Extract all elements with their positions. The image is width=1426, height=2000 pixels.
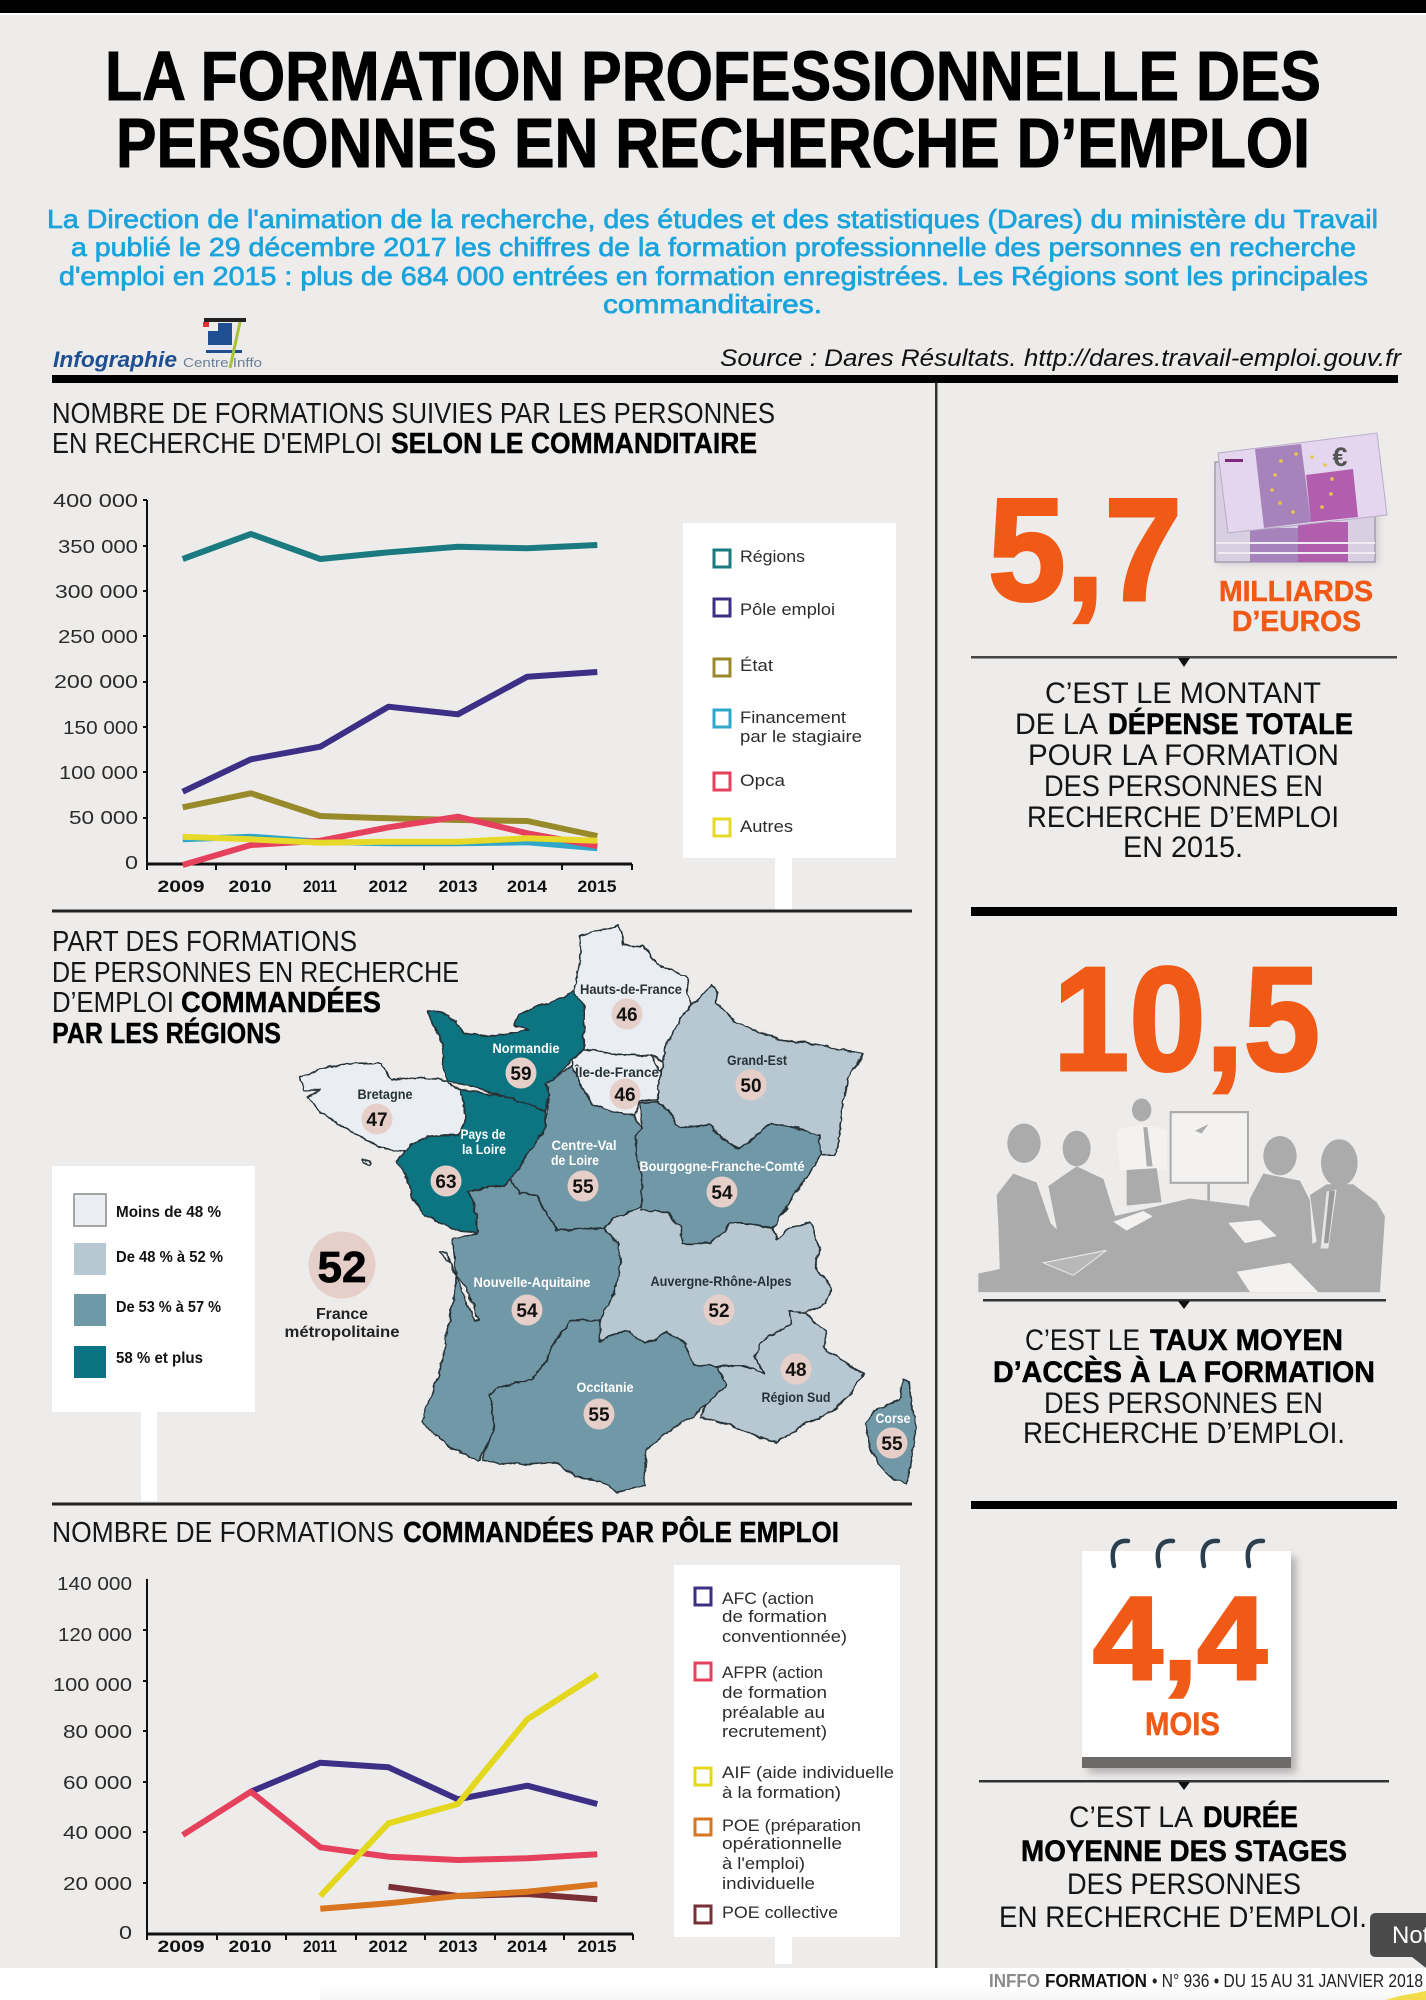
region: Normandie: Normandie (492, 1040, 560, 1056)
intro text (47, 204, 1378, 319)
region: Corse: 55 (881, 1434, 903, 1455)
heading: Pôle emploi (52, 1515, 839, 1549)
legend: Pôle emploi: AIF (aide individuelle (722, 1763, 894, 1782)
text: dépense totale (1015, 677, 1353, 864)
legend: Pôle emploi: POE (préparation (722, 1816, 861, 1835)
line chart: commanditaire: 200 000 (54, 672, 138, 692)
line chart: Pôle emploi: 120 000 (58, 1625, 132, 1645)
line chart: commanditaire: 100 000 (59, 763, 138, 783)
legend: commanditaire: Opca (740, 771, 786, 790)
region: Grand-Est (727, 1052, 787, 1100)
region: Hauts-de-France: Hauts-de-France (580, 981, 682, 997)
icon: euro banknotes (1215, 433, 1387, 564)
line chart: commanditaire: 0 (125, 853, 138, 873)
line chart: Pôle emploi: 2011 (303, 1937, 337, 1956)
callout: France métropolitaine 52: 52 (318, 1243, 366, 1292)
line chart: Pôle emploi: 2015 (578, 1937, 616, 1956)
heading: part des formations: PAR LES RÉGIONS (52, 1016, 281, 1050)
icon: calendar with 4,4 mois (1082, 1541, 1296, 1773)
legend: map: Moins de 48 % (116, 1204, 221, 1221)
arrow: divider pointer (971, 656, 1397, 667)
region: Corse (876, 1410, 911, 1458)
region: Région Sud (762, 1354, 830, 1405)
text: taux moyen: DES PERSONNES EN (1044, 1387, 1323, 1420)
line chart: commanditaire: 400 000 (53, 491, 138, 511)
heading: Pôle emploi: NOMBRE DE FORMATIONS (52, 1517, 394, 1549)
region: Pays de la Loire (430, 1126, 506, 1196)
text: durée moyenne: DURÉE (1203, 1800, 1298, 1834)
heading: commanditaire: SELON LE COMMANDITAIRE (391, 428, 757, 460)
legend: map: De 48 % à 52 % (116, 1249, 223, 1266)
line chart: Pôle emploi: 2012 (368, 1937, 408, 1956)
region: Auvergne-Rhône-Alpes (650, 1273, 792, 1326)
region: Grand-Est: 50 (740, 1076, 762, 1097)
line chart: commanditaire: 300 000 (55, 582, 138, 602)
region: Normandie (492, 1040, 560, 1088)
line chart: Pôle emploi: 0 (119, 1923, 132, 1943)
figure: 10,5: 10,5 (1053, 937, 1320, 1102)
legend: Pôle emploi: à la formation) (722, 1783, 841, 1802)
region: Pays de la Loire: la Loire (462, 1141, 506, 1157)
line chart: Pôle emploi: 2009 (158, 1937, 204, 1956)
line chart: Pôle emploi: 80 000 (63, 1722, 132, 1742)
panel: 5,7 milliards d'euros (971, 433, 1397, 864)
region: Nouvelle-Aquitaine: 54 (516, 1301, 538, 1322)
callout: France métropolitaine 52 (284, 1232, 400, 1341)
legend: Pôle emploi: recrutement) (722, 1722, 827, 1741)
region: Auvergne-Rhône-Alpes: Auvergne-Rhône-Alpes (650, 1273, 792, 1289)
figure: 5,7: 5,7 (988, 468, 1182, 631)
line chart: commanditaire: 2013 (438, 877, 478, 896)
region: Région Sud: Région Sud (762, 1389, 830, 1405)
legend: commanditaire: par le stagiaire (740, 727, 862, 746)
tooltip (1370, 1913, 1426, 1968)
text: taux moyen: TAUX MOYEN (1150, 1324, 1343, 1357)
heading: commanditaire (52, 398, 775, 460)
heading: part des formations: D’EMPLOI (52, 987, 174, 1019)
legend: commanditaire: Pôle emploi (740, 600, 835, 619)
text: dépense totale: C’EST LE MONTANT (1045, 677, 1321, 710)
line chart: Pôle emploi: 140 000 (57, 1574, 132, 1594)
text: dépense totale: DÉPENSE TOTALE (1108, 707, 1353, 741)
icon: meeting silhouette (978, 1099, 1385, 1292)
region: Bourgogne-Franche-Comté: Bourgogne-Franche-Comté (640, 1158, 805, 1174)
region: Auvergne-Rhône-Alpes: 52 (708, 1301, 730, 1322)
line chart: Pôle emploi: 2014 (507, 1937, 548, 1956)
legend: commanditaire: Régions (740, 547, 805, 566)
footer: FORMATION (1045, 1971, 1147, 1991)
map of France (302, 925, 916, 1492)
callout: France métropolitaine 52: France (316, 1306, 368, 1323)
legend: map: 58 % et plus (116, 1350, 203, 1367)
region: Pays de la Loire: Pays de (460, 1126, 506, 1142)
title (105, 37, 1321, 182)
line chart: commanditaire (53, 491, 632, 896)
heading: part des formations: DE PERSONNES EN RECHERCHE (52, 957, 459, 989)
line chart: commanditaire: 2014 (507, 877, 548, 896)
region: Bretagne: Bretagne (358, 1086, 413, 1102)
region: Centre-Val de Loire (551, 1137, 616, 1202)
label: milliards d'euros (1219, 576, 1373, 638)
legend: Pôle emploi: opérationnelle (722, 1834, 842, 1853)
source: Source : Dares Résultats. http://dares.travail-emploi.gouv.fr (720, 345, 1402, 372)
region: Bourgogne-Franche-Comté: 54 (711, 1183, 733, 1204)
heading: commanditaire: EN RECHERCHE D'EMPLOI (52, 428, 382, 460)
region: Nouvelle-Aquitaine (474, 1274, 591, 1326)
line chart: commanditaire: 2015 (578, 877, 616, 896)
region: Île-de-France: Île-de-France (574, 1063, 659, 1080)
intro text: a publié le 29 décembre 2017 les chiffres de la formation professionnelle des personnes en recherche (71, 232, 1356, 262)
legend: map: De 53 % à 57 % (116, 1299, 221, 1316)
line chart: Pôle emploi: 2010 (228, 1937, 272, 1956)
intro text: d'emploi en 2015 : plus de 684 000 entrées en formation enregistrées. Les Régions sont les principales (59, 261, 1368, 291)
text: taux moyen: D’ACCÈS À LA FORMATION (993, 1355, 1375, 1389)
line chart: Pôle emploi: 40 000 (63, 1823, 132, 1843)
text: dépense totale: EN 2015. (1123, 831, 1243, 864)
panel: formations selon le commanditaire (52, 398, 896, 910)
line chart: commanditaire: 2009 (158, 877, 204, 896)
text: durée moyenne: EN RECHERCHE D’EMPLOI. (999, 1901, 1367, 1934)
region: Grand-Est: Grand-Est (727, 1052, 787, 1068)
region: Centre-Val de Loire: 55 (572, 1177, 594, 1198)
line chart: commanditaire: 250 000 (58, 627, 138, 647)
icon: euro banknotes: € (1332, 442, 1348, 472)
legend: Pôle emploi: AFPR (action (722, 1663, 823, 1682)
credit: Infographie Centre Inffo (53, 318, 262, 372)
region: Bretagne: 47 (366, 1110, 388, 1131)
region: Centre-Val de Loire: Centre-Val (552, 1137, 616, 1153)
intro text: La Direction de l'animation de la recherche, des études et des statistiques (Dares) du ministère du Travail (47, 204, 1378, 234)
line chart: commanditaire: 2012 (368, 877, 408, 896)
region: Hauts-de-France: 46 (616, 1005, 638, 1026)
region: Hauts-de-France (580, 981, 682, 1030)
text: dépense totale: RECHERCHE D’EMPLOI (1027, 801, 1339, 834)
panel: formations commandées par Pôle emploi (52, 1515, 900, 1964)
text: dépense totale: DE LA (1015, 708, 1098, 741)
legend: Pôle emploi: de formation (722, 1683, 827, 1702)
legend: Pôle emploi: de formation (722, 1607, 827, 1626)
legend: Pôle emploi: préalable au (722, 1703, 825, 1722)
credit: Infographie Centre Inffo: Infographie (53, 347, 177, 372)
region: Île-de-France (574, 1063, 659, 1110)
text: dépense totale: POUR LA FORMATION (1028, 739, 1339, 772)
legend: map (52, 1166, 255, 1501)
text: dépense totale: DES PERSONNES EN (1044, 770, 1323, 803)
line chart: Pôle emploi: 60 000 (63, 1773, 132, 1793)
panel: part des formations commandées par les régions (52, 925, 916, 1501)
region: Nouvelle-Aquitaine: Nouvelle-Aquitaine (474, 1274, 591, 1290)
heading: part des formations: COMMANDÉES (181, 985, 381, 1019)
icon: calendar with 4,4 mois: 4,4 (1093, 1573, 1267, 1705)
icon: calendar with 4,4 mois: MOIS (1145, 1706, 1220, 1742)
line chart: Pôle emploi (53, 1574, 633, 1956)
region: Centre-Val de Loire: de Loire (551, 1152, 599, 1168)
region: Bretagne (358, 1086, 413, 1134)
line chart: Pôle emploi: 2013 (438, 1937, 478, 1956)
region: Corse: Corse (876, 1410, 911, 1426)
intro text: commanditaires. (603, 289, 822, 319)
region: Normandie: 59 (510, 1064, 532, 1085)
icon: Centre Inffo logo (203, 318, 246, 368)
region: Région Sud: 48 (785, 1360, 807, 1381)
legend: Pôle emploi: POE collective (722, 1903, 838, 1922)
legend: Pôle emploi: individuelle (722, 1874, 815, 1893)
heading: part des formations: PART DES FORMATIONS (52, 926, 357, 958)
text: durée moyenne: DES PERSONNES (1067, 1868, 1301, 1901)
panel: 4,4 mois (979, 1541, 1389, 1934)
line chart: commanditaire: 2011 (303, 877, 337, 896)
heading: part des formations (52, 926, 459, 1050)
region: Occitanie: Occitanie (576, 1379, 634, 1395)
legend: commanditaire (683, 523, 896, 910)
region: Occitanie (576, 1379, 634, 1430)
arrow: divider pointer (983, 1299, 1386, 1309)
legend: commanditaire: État (740, 656, 773, 675)
text: durée moyenne: MOYENNE DES STAGES (1021, 1835, 1347, 1868)
line chart: Pôle emploi: 100 000 (53, 1675, 132, 1695)
region: Bourgogne-Franche-Comté (640, 1158, 805, 1208)
arrow: divider pointer (979, 1780, 1389, 1790)
legend: Pôle emploi: à l'emploi) (722, 1854, 805, 1873)
text: durée moyenne: C’EST LA (1069, 1801, 1193, 1834)
line chart: Pôle emploi: 20 000 (63, 1874, 132, 1894)
line chart: commanditaire: 2010 (228, 877, 272, 896)
legend: commanditaire: Autres (740, 817, 793, 836)
text: durée moyenne (999, 1800, 1367, 1934)
legend: Pôle emploi: conventionnée) (722, 1627, 847, 1646)
credit: Infographie Centre Inffo: Centre Inffo (183, 355, 262, 370)
region: Occitanie: 55 (588, 1405, 610, 1426)
region: Île-de-France: 46 (614, 1085, 636, 1106)
label: milliards d'euros: MILLIARDS (1219, 576, 1373, 608)
line chart: commanditaire: 150 000 (63, 718, 138, 738)
text: taux moyen: RECHERCHE D’EMPLOI. (1023, 1417, 1345, 1450)
line chart: commanditaire: 350 000 (58, 537, 138, 557)
label: milliards d'euros: D’EUROS (1232, 606, 1361, 638)
heading: Pôle emploi: COMMANDÉES PAR PÔLE EMPLOI (403, 1515, 839, 1549)
region: Pays de la Loire: 63 (435, 1172, 457, 1193)
heading: commanditaire: NOMBRE DE FORMATIONS SUIVIES PAR LES PERSONNES (52, 398, 775, 430)
legend: commanditaire: Financement (740, 708, 846, 727)
legend: Pôle emploi: AFC (action (722, 1589, 814, 1608)
line chart: commanditaire: 50 000 (69, 808, 138, 828)
footer (0, 1968, 1426, 2000)
footer: INFFO (989, 1971, 1040, 1991)
legend: Pôle emploi (674, 1565, 900, 1964)
text: taux moyen (993, 1324, 1375, 1450)
panel: 10,5 taux moyen (978, 937, 1386, 1450)
callout: France métropolitaine 52: métropolitaine (284, 1324, 400, 1341)
text: taux moyen: C’EST LE (1025, 1324, 1140, 1357)
